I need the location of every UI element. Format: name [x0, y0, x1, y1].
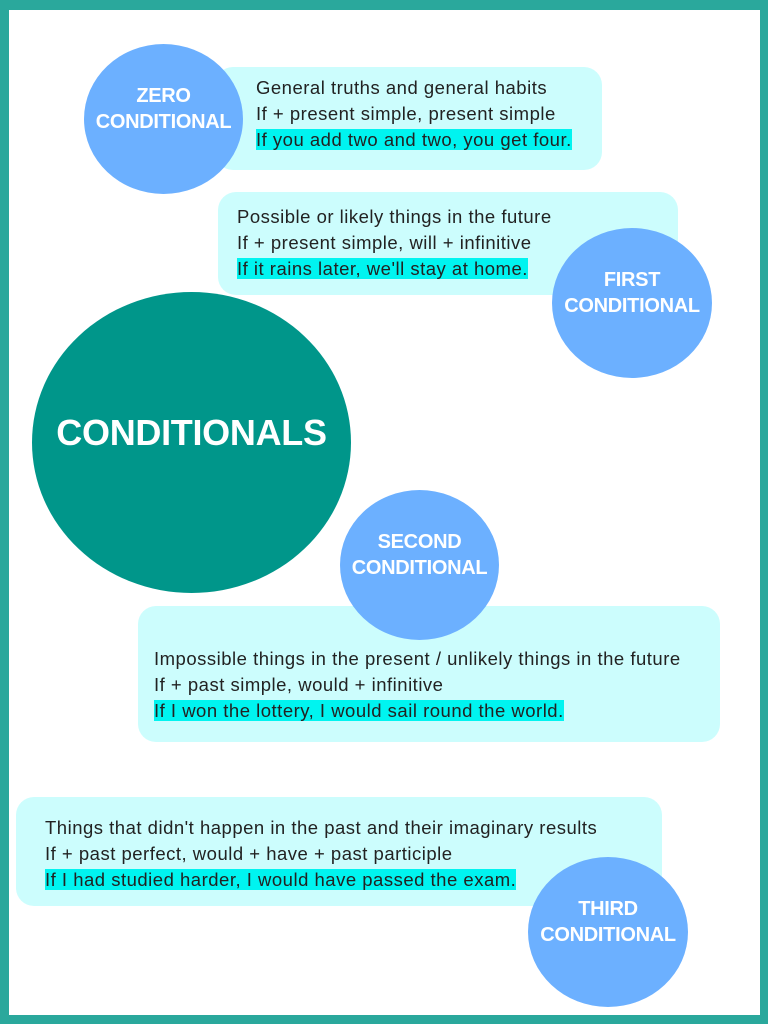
- circle: third conditional: [528, 857, 688, 1007]
- text: zero conditional: General truths and general habits: [256, 77, 547, 98]
- text: first conditional: If it rains later, we'll stay at home.: [237, 258, 528, 279]
- circle: zero conditional: CONDITIONAL: [96, 111, 231, 133]
- text: zero conditional: If + present simple, present simple: [256, 103, 556, 124]
- panel: third conditional box: [16, 797, 662, 906]
- text: first conditional: If + present simple, will + infinitive: [237, 232, 532, 253]
- text: third conditional: If + past perfect, would + have + past participle: [45, 843, 453, 864]
- text: second conditional: [154, 648, 681, 721]
- text: third conditional: If I had studied harder, I would have passed the exam.: [45, 869, 516, 890]
- circle: second conditional: SECOND: [378, 531, 461, 553]
- circle: main title: CONDITIONALS: [56, 412, 327, 452]
- panel: second conditional box: [138, 606, 720, 742]
- circle: second conditional: CONDITIONAL: [352, 557, 487, 579]
- text: zero conditional: If you add two and two, you get four.: [256, 129, 572, 150]
- text: third conditional: Things that didn't happen in the past and their imaginary results: [45, 817, 597, 838]
- text: first conditional: Possible or likely things in the future: [237, 206, 552, 227]
- circle: first conditional: FIRST: [604, 269, 660, 291]
- circle: first conditional: [552, 228, 712, 378]
- text: second conditional: If + past simple, would + infinitive: [154, 674, 443, 695]
- panel: first conditional box: [218, 192, 678, 295]
- text: second conditional: Impossible things in the present / unlikely things in the future: [154, 648, 681, 669]
- text: zero conditional: [256, 77, 572, 150]
- text: second conditional: If I won the lottery, I would sail round the world.: [154, 700, 564, 721]
- circle: first conditional: CONDITIONAL: [564, 295, 700, 317]
- circle: main title: [32, 292, 351, 593]
- circle: third conditional: CONDITIONAL: [540, 924, 676, 946]
- circle: zero conditional: [84, 44, 243, 194]
- circle: zero conditional: ZERO: [136, 85, 191, 107]
- text: first conditional: [237, 206, 552, 279]
- circle: second conditional: [340, 490, 499, 640]
- text: third conditional: [45, 817, 597, 890]
- panel: zero conditional box: [215, 67, 602, 170]
- circle: third conditional: THIRD: [578, 898, 638, 920]
